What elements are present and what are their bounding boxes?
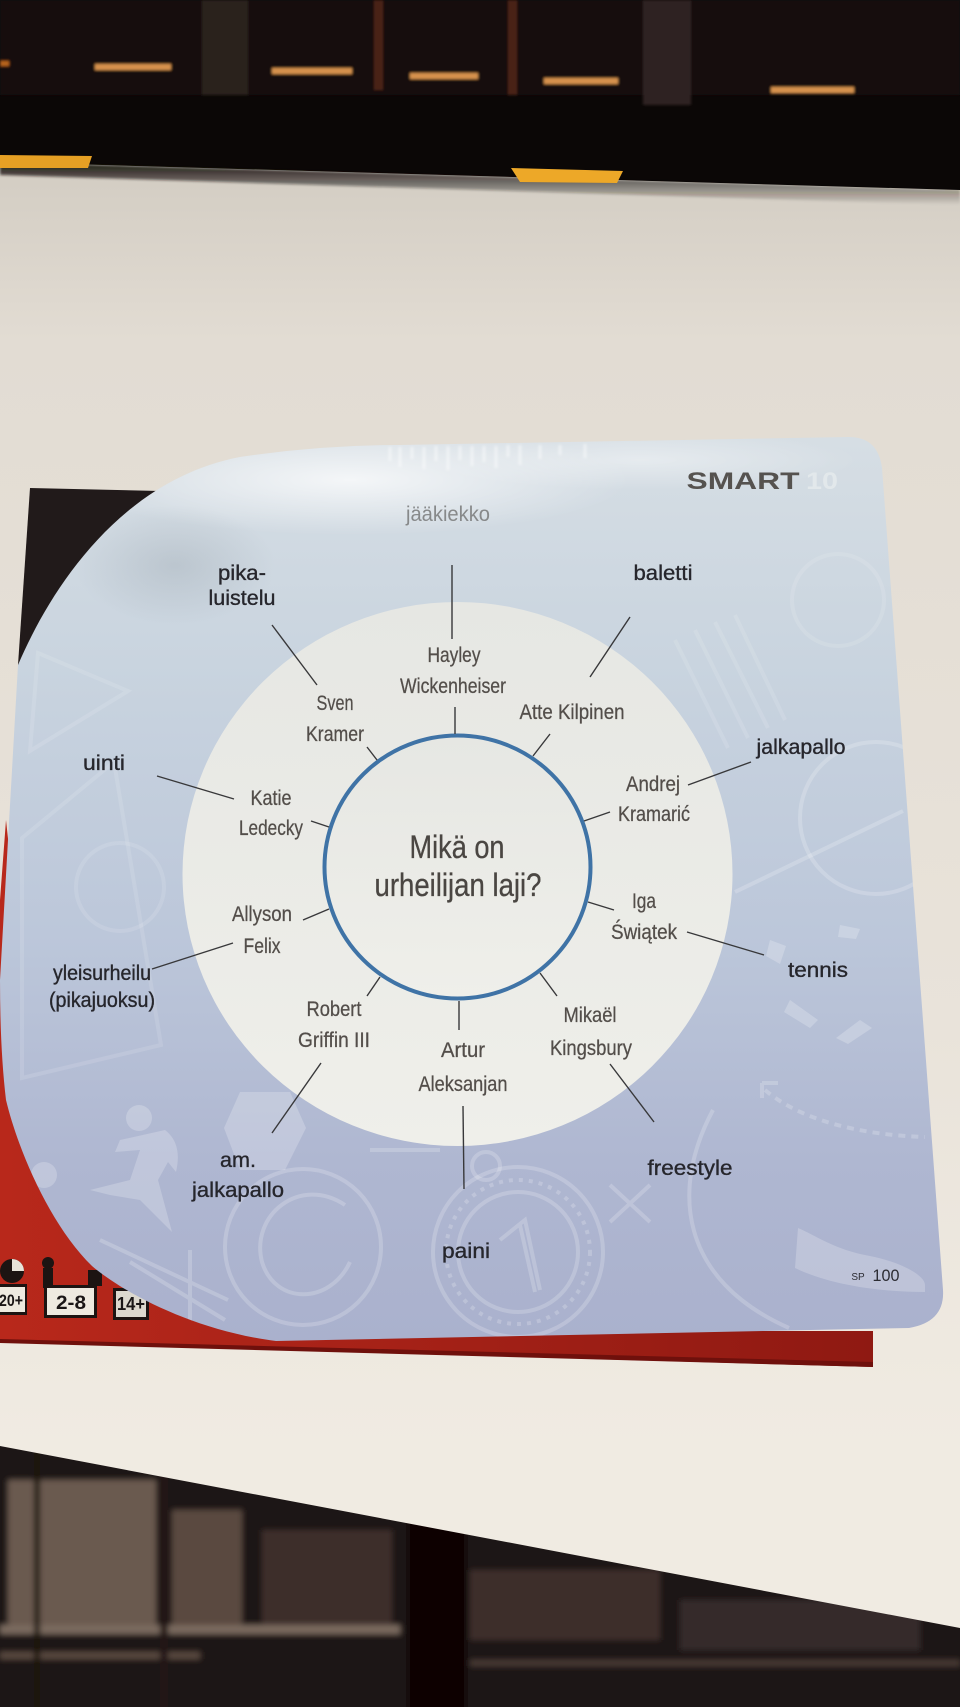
box info: playing time: [0, 1259, 27, 1315]
spoke: Robert Griffin III – am. jalkapallo: Robert: [306, 998, 362, 1021]
spoke: Sven Kramer – pikaluistelu: Sven: [316, 692, 354, 715]
spoke: Allyson Felix – yleisurheilu: (pikajuoksu): [49, 989, 155, 1012]
spoke: Robert Griffin III – am. jalkapallo: Griffin III: [298, 1029, 370, 1052]
spoke: Allyson Felix – yleisurheilu: Felix: [244, 935, 281, 958]
box info: age: 14+: [117, 1294, 145, 1314]
card background: [0, 437, 943, 1341]
box info: age: [113, 1288, 149, 1320]
spoke: Andrej Kramarić – jalkapallo: [584, 736, 846, 826]
spoke: Mikaël Kingsbury – freestyle: Kingsbury: [550, 1037, 632, 1060]
card decoration: sport pictograms: [22, 425, 952, 1337]
spoke: Sven Kramer – pikaluistelu: Kramer: [306, 723, 364, 746]
spoke: Iga Świątek – tennis: Świątek: [611, 920, 677, 944]
inner circle: [182, 602, 732, 1146]
spoke: Mikaël Kingsbury – freestyle: [540, 973, 732, 1180]
plaid fabric below table: [0, 1440, 960, 1707]
logo: SMART 10: SMART: [686, 468, 800, 495]
question text: urheilijan laji?: [374, 867, 542, 903]
spoke: Allyson Felix – yleisurheilu: [49, 903, 329, 1012]
logo: SMART 10: 10: [806, 468, 838, 495]
logo: SMART 10: [686, 468, 838, 495]
spoke: Hayley Wickenheiser – jääkiekko: [400, 503, 506, 734]
spoke: Sven Kramer – pikaluistelu: [208, 562, 377, 760]
spoke: Artur Aleksanjan – paini: Aleksanjan: [418, 1073, 508, 1096]
spoke: Hayley Wickenheiser – jääkiekko: Hayley: [428, 644, 481, 667]
spoke: Artur Aleksanjan – paini: Artur: [441, 1039, 485, 1062]
spoke: Artur Aleksanjan – paini: [418, 1001, 508, 1263]
spoke: Katie Ledecky – uinti: [83, 752, 329, 840]
spoke: Sven Kramer – pikaluistelu: luistelu: [208, 587, 276, 610]
spoke: Artur Aleksanjan – paini: paini: [442, 1240, 490, 1263]
card number: SP 100: SP: [851, 1272, 865, 1283]
spoke: Andrej Kramarić – jalkapallo: jalkapallo: [755, 736, 846, 759]
card number: SP 100: 100: [872, 1266, 900, 1285]
spoke: Hayley Wickenheiser – jääkiekko: Wickenheiser: [400, 675, 506, 698]
dark shelf with orange lights at top: [0, 0, 960, 205]
spoke: Hayley Wickenheiser – jääkiekko: jääkiekko: [405, 503, 490, 526]
question text: Mikä on: [410, 829, 504, 865]
spoke: Mikaël Kingsbury – freestyle: freestyle: [648, 1157, 732, 1180]
spoke: Iga Świątek – tennis: tennis: [788, 959, 848, 982]
card number: SP 100: [851, 1266, 900, 1285]
box info: players: 2-8: [56, 1293, 86, 1314]
spoke: Sven Kramer – pikaluistelu: pika-: [218, 562, 266, 585]
spoke: Allyson Felix – yleisurheilu: Allyson: [232, 903, 292, 926]
spoke: Katie Ledecky – uinti: Katie: [250, 787, 292, 810]
game box behind card: [0, 488, 873, 1367]
spoke: Allyson Felix – yleisurheilu: yleisurheilu: [53, 962, 151, 985]
spoke: Katie Ledecky – uinti: uinti: [83, 752, 125, 775]
spoke: Robert Griffin III – am. jalkapallo: am.: [220, 1149, 256, 1172]
spoke: Atte Kilpinen – baletti: baletti: [634, 562, 692, 585]
panel: question card: [0, 425, 952, 1341]
spoke: Robert Griffin III – am. jalkapallo: jalkapallo: [191, 1179, 284, 1202]
spoke: Atte Kilpinen – baletti: [520, 562, 692, 756]
spoke: Mikaël Kingsbury – freestyle: Mikaël: [564, 1004, 616, 1027]
spoke: Robert Griffin III – am. jalkapallo: [191, 977, 380, 1202]
spoke: Iga Świątek – tennis: Iga: [632, 890, 656, 913]
spoke: Atte Kilpinen – baletti: Atte Kilpinen: [520, 701, 624, 724]
spoke: Andrej Kramarić – jalkapallo: Kramarić: [618, 803, 690, 826]
box info: players: [42, 1257, 105, 1318]
spoke: Katie Ledecky – uinti: Ledecky: [239, 817, 303, 840]
spoke: Iga Świątek – tennis: [588, 890, 848, 982]
question text: [374, 829, 542, 903]
question ring: [324, 736, 590, 998]
spoke: Andrej Kramarić – jalkapallo: Andrej: [626, 773, 680, 796]
